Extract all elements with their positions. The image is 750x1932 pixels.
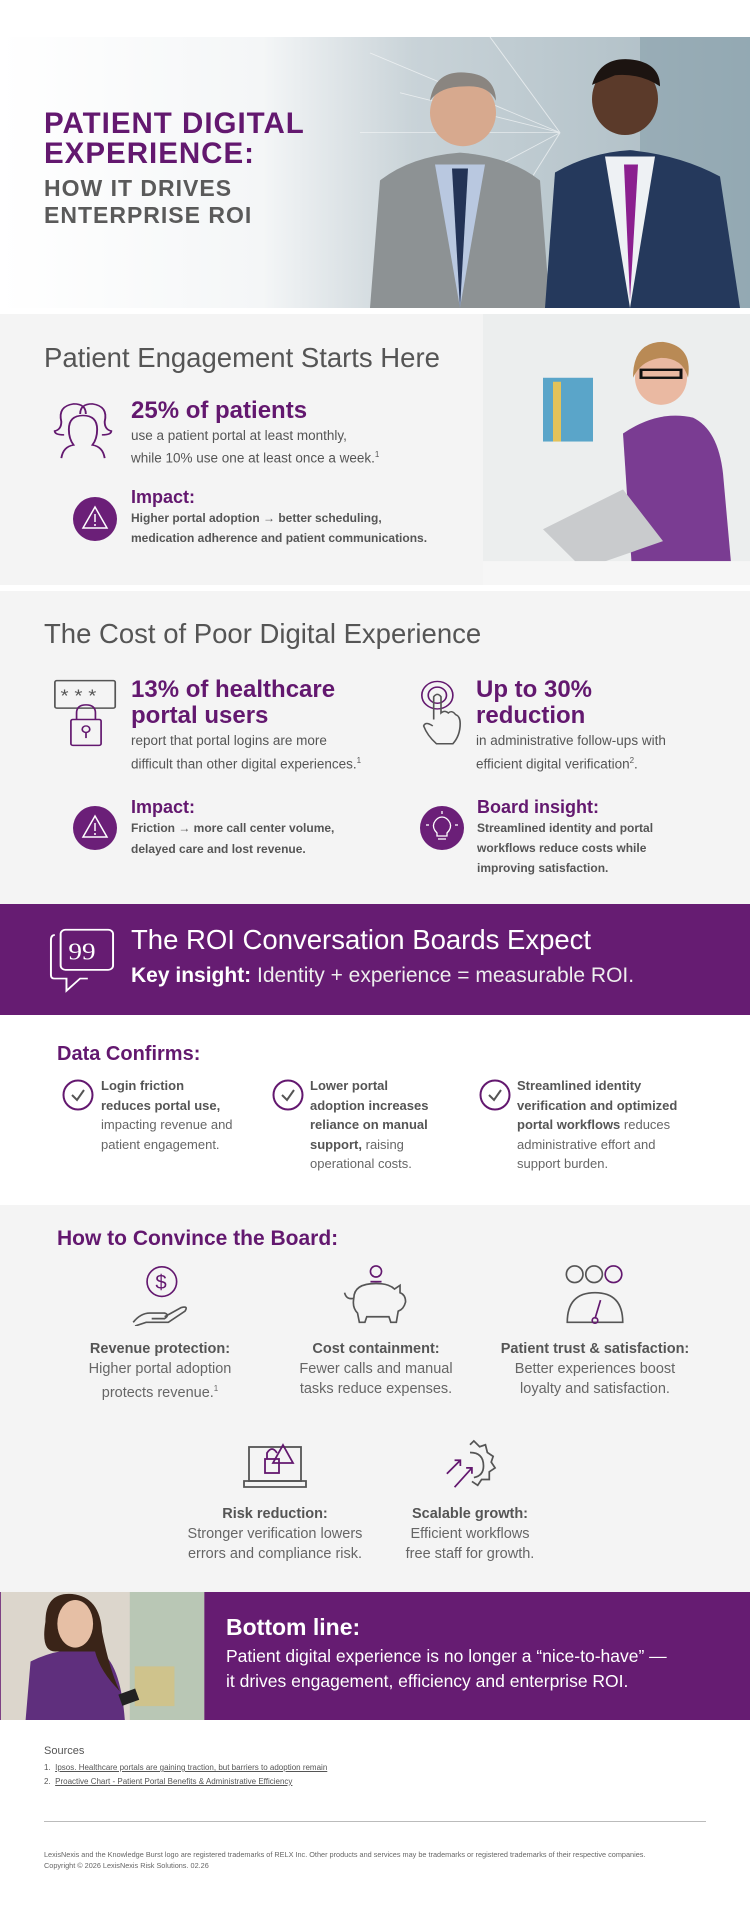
- stat: 30%: reduction: [476, 702, 585, 729]
- item: scalable growth: Scalable growth:: [412, 1506, 528, 1522]
- title: EXPERIENCE:: [44, 137, 255, 170]
- stat: 13%: [131, 676, 361, 772]
- item 3: portal workflows reduces: [517, 1117, 670, 1132]
- sources: Sources: [44, 1745, 84, 1757]
- footer legal text: [44, 1850, 645, 1870]
- item 3: support burden.: [517, 1156, 608, 1171]
- sources: 2. Proactive Chart - Patient Portal Benefits & Administrative Efficiency: [44, 1777, 292, 1786]
- stat: 30%: in administrative follow-ups with: [476, 733, 666, 748]
- title: ENTERPRISE ROI: [44, 202, 252, 228]
- item 1: reduces portal use,: [101, 1098, 220, 1112]
- item 2: reliance on manual: [310, 1117, 428, 1132]
- title: PATIENT DIGITAL: [44, 107, 305, 140]
- impact text: Impact:: [131, 797, 195, 817]
- heading: data confirms: Data Confirms:: [57, 1043, 200, 1065]
- stat: 30%: [476, 676, 666, 772]
- stat: 13%: 13% of healthcare: [131, 676, 335, 703]
- item: risk reduction: errors and compliance risk.: [188, 1546, 362, 1562]
- bottom line text: Bottom line:: [226, 1614, 360, 1640]
- bottom line text: Patient digital experience is no longer a “nice-to-have” —: [226, 1646, 667, 1666]
- icon: quote bubble: 99: [68, 938, 96, 965]
- item 1: [62, 1078, 233, 1152]
- footer legal text: Copyright © 2026 LexisNexis Risk Solutions. 02.26: [44, 1861, 209, 1870]
- icon: lightbulb circle: [420, 806, 464, 850]
- banner heading: The ROI Conversation Boards Expect: [131, 924, 591, 955]
- sources: [44, 1745, 328, 1786]
- board insight text: Streamlined identity and portal: [477, 821, 653, 835]
- key insight: Key insight: Identity + experience = measurable ROI.: [131, 964, 634, 987]
- item: revenue protection: Higher portal adoption: [89, 1361, 231, 1377]
- item: scalable growth: Efficient workflows: [410, 1526, 530, 1542]
- icon: password lock: [54, 680, 116, 746]
- impact text: [131, 487, 427, 545]
- board insight text: Board insight:: [477, 797, 599, 817]
- panel: how to convince the board: [0, 1205, 750, 1592]
- item: revenue protection: $: [155, 1272, 167, 1294]
- title: HOW IT DRIVES: [44, 175, 232, 201]
- bottom line text: it drives engagement, efficiency and enterprise ROI.: [226, 1671, 628, 1691]
- item: cost containment: Fewer calls and manual: [299, 1361, 453, 1377]
- item: risk reduction: Risk reduction:: [222, 1506, 328, 1522]
- item 3: administrative effort and: [517, 1136, 656, 1152]
- item 3: verification and optimized: [517, 1098, 677, 1112]
- item: cost containment: Cost containment:: [312, 1341, 440, 1357]
- board insight text: [477, 797, 653, 875]
- item: patient trust: [501, 1265, 689, 1397]
- icon: quote bubble: [50, 928, 114, 993]
- stat: 25%: [131, 397, 379, 466]
- item 2: support, raising: [310, 1136, 404, 1152]
- icon: warning circle: [73, 806, 117, 850]
- icon: people: [54, 403, 112, 458]
- heading: How to Convince the Board:: [57, 1227, 338, 1250]
- item: risk reduction: [188, 1443, 362, 1562]
- item: cost containment: tasks reduce expenses.: [300, 1381, 452, 1397]
- stat: 25%: use a patient portal at least monthly,: [131, 428, 347, 443]
- item 1: impacting revenue and: [101, 1117, 233, 1132]
- panel: bottom line: [0, 1592, 750, 1720]
- icon: password lock: * * *: [61, 687, 97, 706]
- board insight text: improving satisfaction.: [477, 861, 608, 875]
- heading: The Cost of Poor Digital Experience: [44, 618, 481, 649]
- item: revenue protection: protects revenue.1: [102, 1384, 218, 1401]
- board insight text: workflows reduce costs while: [477, 841, 646, 855]
- stat: 13%: portal users: [131, 702, 268, 729]
- item 2: adoption increases: [310, 1098, 428, 1112]
- banner: ROI conversation: [0, 904, 750, 1015]
- hero: [0, 37, 750, 308]
- item 1: patient engagement.: [101, 1136, 220, 1152]
- stat: 30%: efficient digital verification2.: [476, 756, 638, 772]
- panel: cost of poor digital experience: [0, 591, 750, 904]
- icon: warning circle: [73, 497, 117, 541]
- item 3: Streamlined identity: [517, 1078, 641, 1093]
- stat: 13%: report that portal logins are more: [131, 733, 327, 748]
- item: scalable growth: free staff for growth.: [406, 1546, 534, 1562]
- panel: patient engagement: [0, 314, 750, 585]
- impact text: [131, 797, 334, 856]
- item: scalable growth: [406, 1440, 534, 1562]
- heading: Patient Engagement Starts Here: [44, 342, 440, 373]
- item: patient trust: Patient trust & satisfaction:: [501, 1341, 689, 1357]
- sources: 1. Ipsos. Healthcare portals are gaining traction, but barriers to adoption remain: [44, 1763, 327, 1772]
- impact text: Impact:: [131, 487, 195, 507]
- data confirms items: [62, 1078, 677, 1171]
- impact text: medication adherence and patient communications.: [131, 531, 427, 545]
- impact text: delayed care and lost revenue.: [131, 842, 306, 856]
- icon: touch hand: [421, 680, 461, 744]
- stat: 25%: while 10% use one at least once a week.1: [131, 450, 379, 466]
- photo: woman with phone: [0, 1592, 204, 1720]
- item: risk reduction: Stronger verification lowers: [188, 1526, 362, 1542]
- hero photo: two businessmen: [360, 37, 750, 308]
- bottom line text: [226, 1614, 667, 1691]
- item 2: Lower portal: [310, 1078, 388, 1093]
- footer legal text: LexisNexis and the Knowledge Burst logo are registered trademarks of RELX Inc. Other products and services may be trademarks or registered trademarks of their respective companies.: [44, 1850, 645, 1859]
- item 3: [480, 1078, 677, 1171]
- item 2: operational costs.: [310, 1156, 412, 1171]
- stat: 25%: 25% of patients: [131, 397, 307, 424]
- item: patient trust: loyalty and satisfaction.: [520, 1381, 670, 1397]
- stat: 13%: difficult than other digital experiences.1: [131, 756, 361, 772]
- item: patient trust: Better experiences boost: [515, 1361, 675, 1377]
- impact text: Higher portal adoption → better scheduling,: [131, 511, 382, 525]
- item 2: [272, 1078, 428, 1171]
- title: [44, 107, 305, 228]
- photo: woman at laptop: [543, 342, 731, 562]
- item: revenue protection: Revenue protection:: [90, 1341, 230, 1357]
- item 1: Login friction: [101, 1078, 184, 1093]
- stat: 30%: Up to 30%: [476, 676, 592, 703]
- item: cost containment: [299, 1265, 453, 1397]
- impact text: Friction → more call center volume,: [131, 821, 334, 835]
- item: revenue protection: [89, 1266, 231, 1401]
